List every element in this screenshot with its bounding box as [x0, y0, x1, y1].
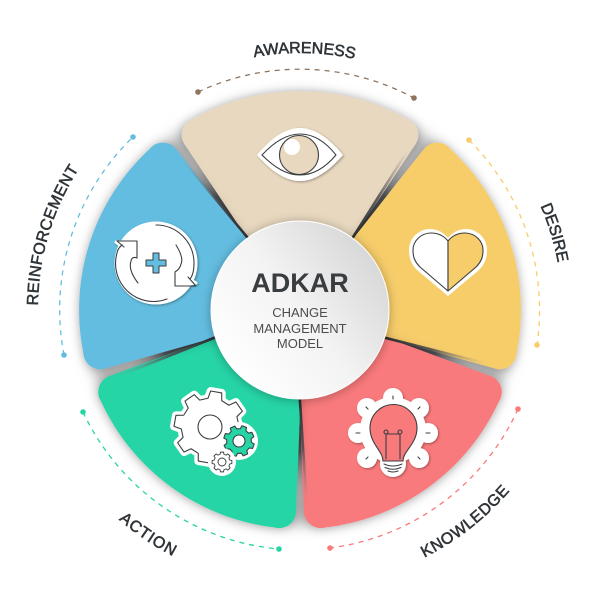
icon: heart	[409, 229, 487, 296]
icon: gears	[169, 386, 259, 476]
centre title: ADKAR	[251, 268, 349, 298]
dashed arc: knowledge	[327, 406, 521, 551]
panel: action	[80, 338, 306, 556]
soft disc shadow	[85, 95, 515, 525]
dark gaps between segments	[123, 158, 477, 495]
segment: desire	[265, 130, 547, 422]
segment: action	[76, 240, 396, 557]
dashed arc: action	[80, 409, 282, 552]
label: desire: DESIRE	[540, 202, 569, 262]
panel: desire	[350, 137, 569, 374]
segment: reinforcement	[53, 130, 335, 422]
centre circle	[211, 221, 389, 399]
dark separator lines over segment edges	[119, 150, 486, 503]
label: awareness: AWARENESS	[254, 42, 356, 58]
panel: awareness	[177, 42, 422, 237]
dashed arc: desire	[466, 137, 540, 348]
segment: awareness	[182, 91, 418, 310]
icon: refresh plus	[116, 223, 196, 303]
label: action: ACTION	[118, 514, 178, 556]
centre disc	[211, 221, 389, 399]
icon: eye	[257, 128, 343, 181]
segment: knowledge	[204, 240, 524, 557]
panel: knowledge	[298, 334, 521, 558]
dashed arc: reinforcement	[60, 134, 136, 358]
centre subtitle: CHANGE	[272, 305, 328, 320]
centre subtitle: MANAGEMENT	[253, 321, 347, 336]
panel: reinforcement	[26, 134, 250, 374]
centre subtitle: MODEL	[277, 336, 323, 351]
icon: light bulb	[348, 388, 438, 477]
label: knowledge: KNOWLEDGE	[420, 484, 510, 558]
label: reinforcement: REINFORCEMENT	[26, 163, 77, 304]
dashed arc: awareness	[195, 69, 417, 101]
